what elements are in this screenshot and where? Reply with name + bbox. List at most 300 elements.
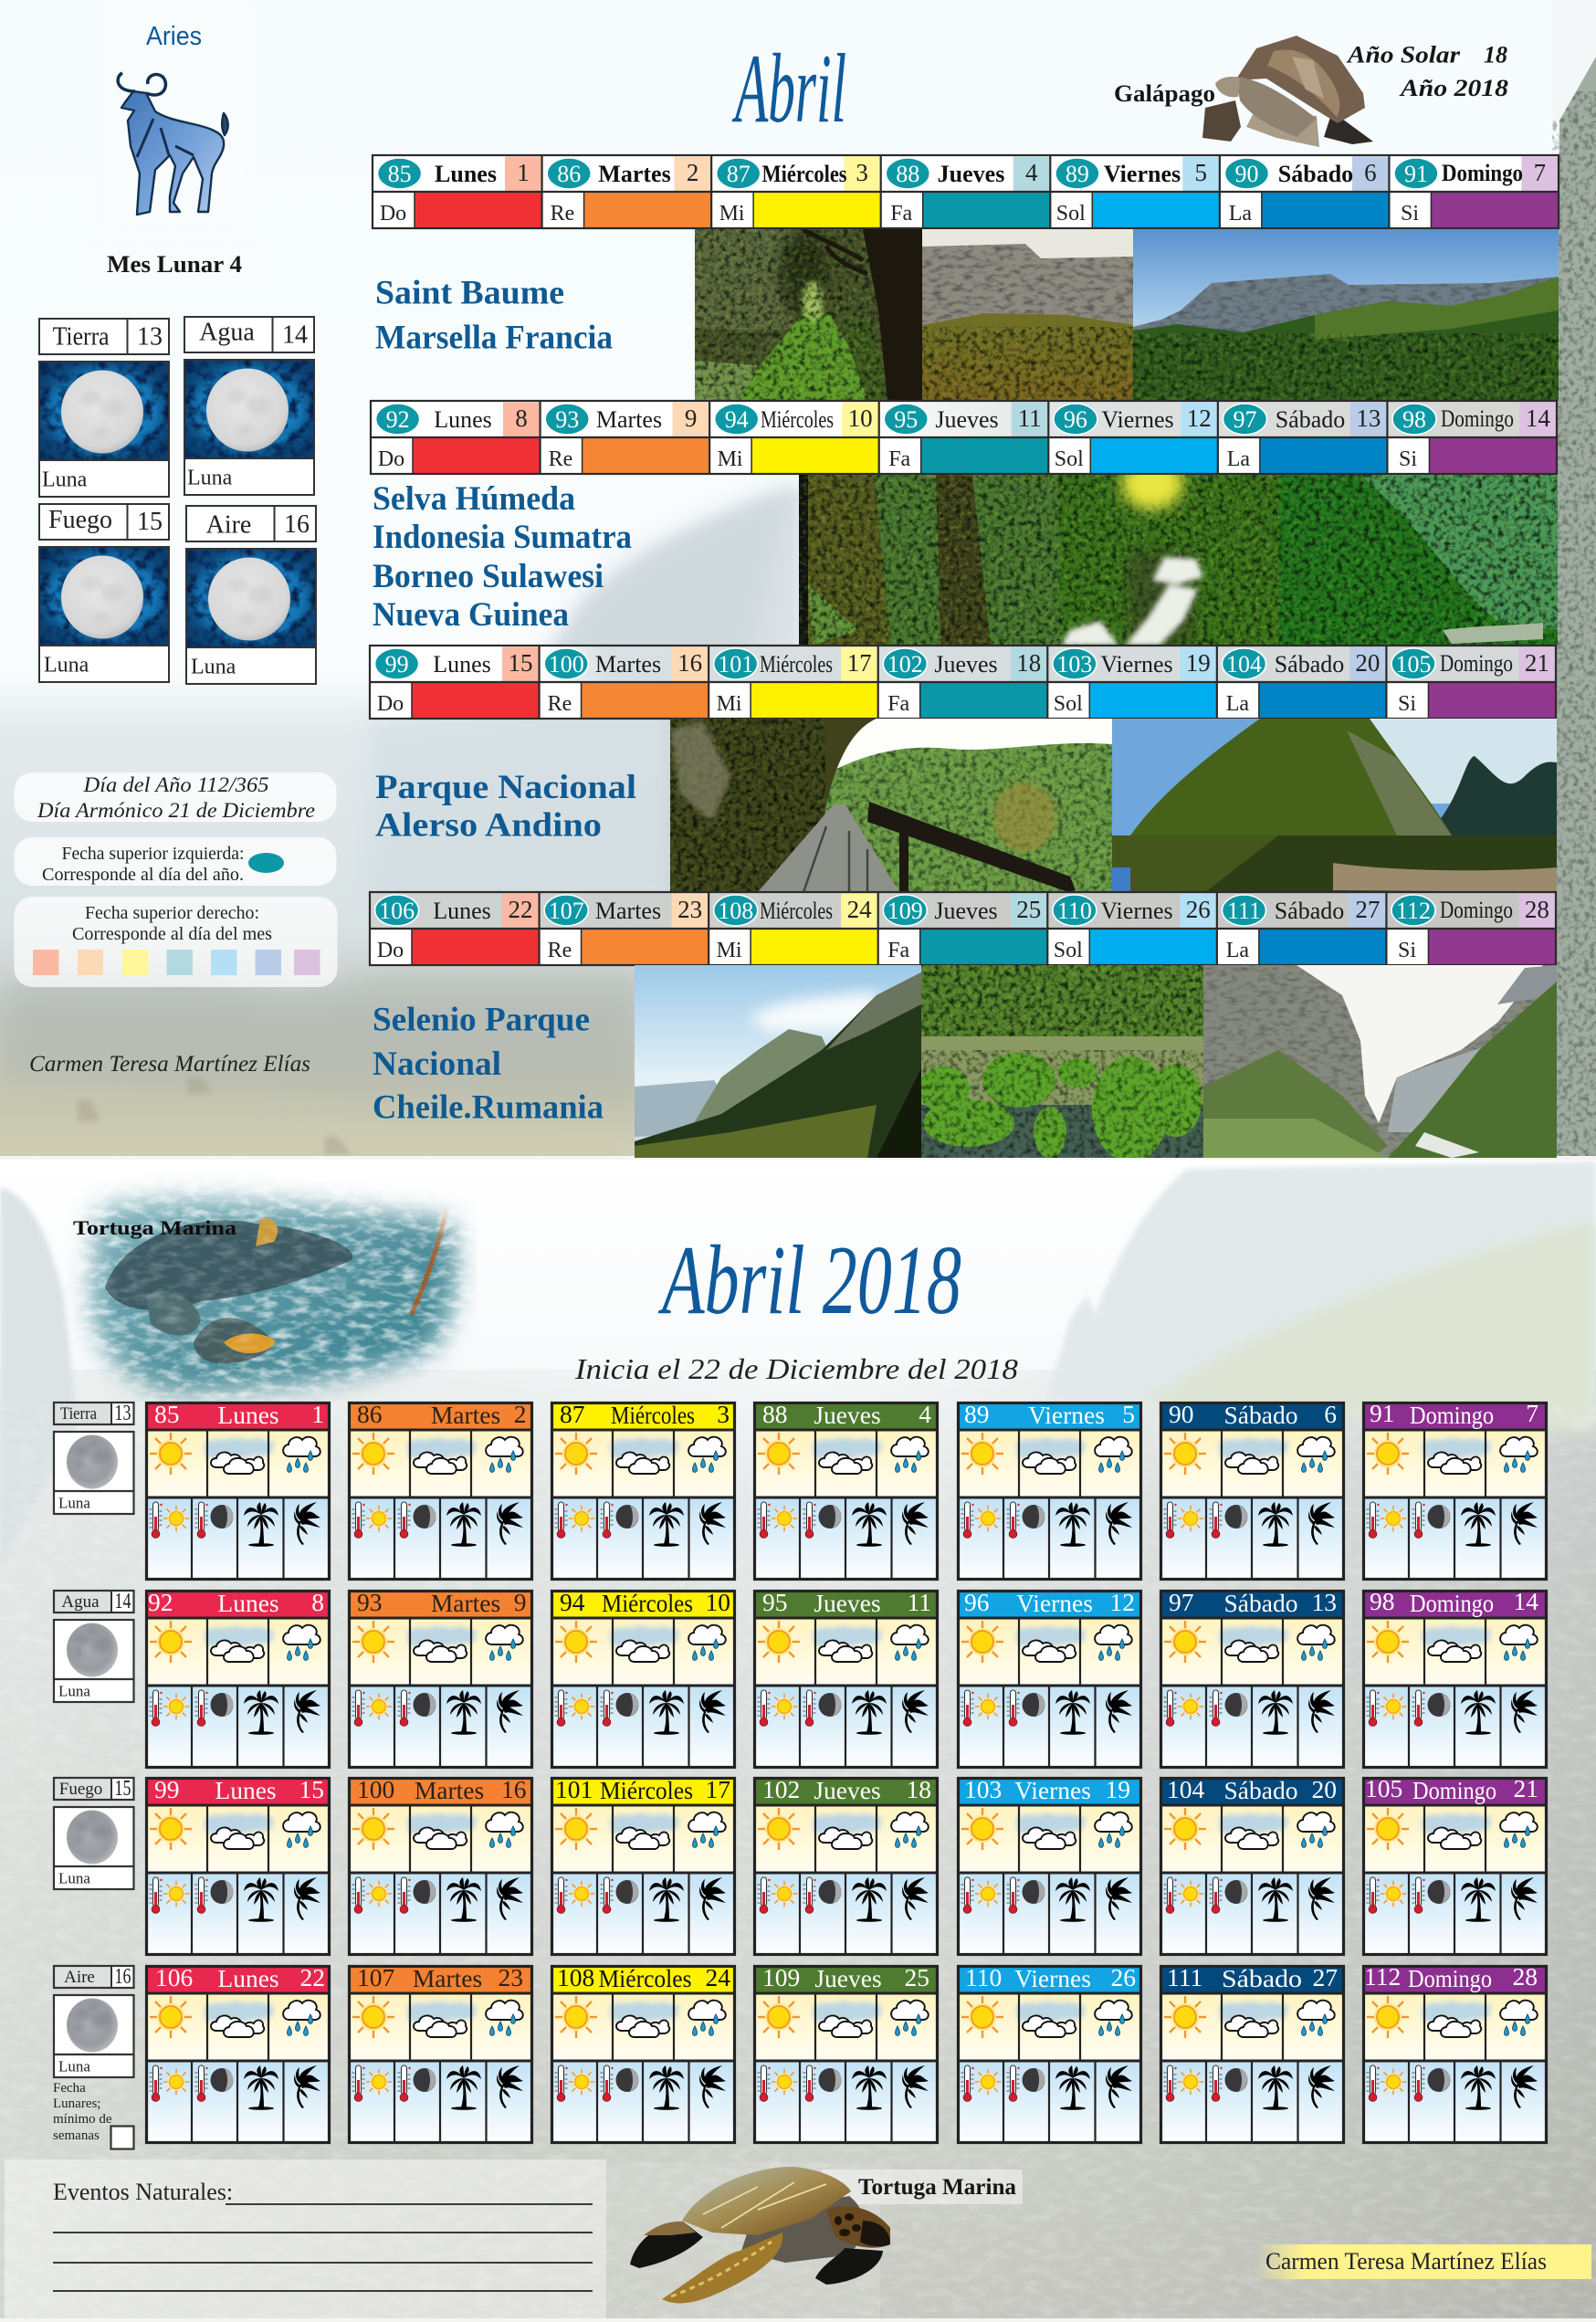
- side moon: Tierra: 13: [115, 1402, 131, 1425]
- day cell: Miércoles 3: 87: [727, 161, 751, 187]
- day cell: Domingo 7: 91: [1404, 161, 1428, 187]
- card: 106 Lunes 22: Lunes: [217, 1964, 279, 1992]
- day cell: Jueves 11: 95: [894, 406, 918, 433]
- card: 98 Domingo 14: Domingo: [1410, 1589, 1494, 1617]
- card: 92 Lunes 8: 92: [148, 1588, 173, 1616]
- day cell: Miércoles 3: Mi: [719, 202, 745, 226]
- title: Abril 2018: Abril 2018: [657, 1225, 961, 1335]
- card: 109 Jueves 25: 25: [904, 1963, 929, 1991]
- side moon: Aire: Aire: [64, 1968, 95, 1987]
- card: 99 Lunes 15: 99: [154, 1775, 179, 1803]
- card: 87 Miércoles 3: 3: [717, 1400, 730, 1428]
- icon: ram: [118, 73, 228, 215]
- day cell: Jueves 18: Jueves: [934, 651, 998, 678]
- card: 107 Martes 23: Martes: [413, 1964, 482, 1992]
- label: Tortuga Marina: Tortuga Marina: [858, 2175, 1017, 2200]
- day cell: Viernes 19: [1054, 649, 1211, 716]
- day cell: Martes 23: Re: [548, 939, 572, 962]
- day cell: Lunes 15: [377, 649, 533, 716]
- card: 95 Jueves 11: 95: [762, 1588, 787, 1616]
- day cell: Jueves 18: 102: [887, 651, 923, 678]
- icon: giant tortoise: [1202, 36, 1373, 147]
- card: 95 Jueves 11: [753, 1588, 939, 1769]
- day cell: Lunes 1: Lunes: [435, 161, 497, 187]
- day cell: Jueves 25: [887, 896, 1041, 962]
- card: 106 Lunes 22: [145, 1963, 331, 2144]
- card: 105 Domingo 21: 21: [1514, 1774, 1538, 1802]
- card: 110 Viernes 26: [957, 1963, 1142, 2144]
- card: 98 Domingo 14: 98: [1370, 1587, 1395, 1615]
- day cell: Miércoles 24: Miércoles: [760, 898, 833, 924]
- card: 93 Martes 9: 9: [514, 1588, 526, 1616]
- panel: day of year: Día del Año 112/365: [82, 773, 268, 796]
- day cell: Sábado 6: La: [1229, 202, 1252, 226]
- day cell: Sábado 6: 6: [1364, 159, 1377, 186]
- day cell: Sábado 13: [1227, 405, 1381, 471]
- card: 85 Lunes 1: [145, 1400, 331, 1581]
- moon card: Tierra: Tierra: [53, 323, 110, 351]
- card: 96 Viernes 12: [957, 1588, 1142, 1769]
- day cell: Sábado 20: 20: [1355, 649, 1380, 677]
- heading: Selenio Parque Nacional Cheile: Cheile.Rumania: [373, 1088, 604, 1127]
- card: 112 Domingo 28: 112: [1364, 1962, 1401, 1991]
- day cell: Martes 2: 2: [687, 159, 698, 186]
- credit: author: Carmen Teresa Martínez Elías: [1265, 2248, 1547, 2275]
- day cell: Jueves 11: 11: [1018, 405, 1042, 432]
- day cell: Martes 16: Martes: [595, 651, 661, 678]
- card: 93 Martes 9: [348, 1588, 533, 1769]
- card: 109 Jueves 25: 109: [762, 1963, 800, 1991]
- day cell: Sábado 13: 97: [1233, 406, 1256, 433]
- day cell: Lunes 8: [378, 405, 528, 471]
- card: 90 Sábado 6: [1160, 1400, 1345, 1581]
- moon card: Fuego: Fuego: [48, 506, 112, 534]
- day cell: Martes 16: [548, 649, 702, 716]
- card: 94 Miércoles 10: [551, 1588, 736, 1769]
- day cell: Sábado 20: La: [1226, 692, 1249, 716]
- card: 111 Sábado 27: 111: [1167, 1963, 1202, 1991]
- title: Abril: Abril: [731, 34, 846, 143]
- day cell: Domingo 21: 21: [1525, 649, 1549, 677]
- day cell: Lunes 8: 8: [515, 405, 528, 432]
- day cell: Domingo 7: Si: [1401, 202, 1419, 226]
- card: 111 Sábado 27: Sábado: [1222, 1964, 1302, 1992]
- card: 98 Domingo 14: 14: [1514, 1587, 1538, 1615]
- moon card: Agua: Luna: [187, 467, 233, 490]
- day cell: Martes 16: 16: [677, 649, 702, 677]
- card: 102 Jueves 18: [753, 1775, 939, 1956]
- day cell: Viernes 12: 12: [1187, 405, 1212, 432]
- photo strip: Selenio Cheile: [373, 965, 1557, 1162]
- moon card: Tierra: 13: [137, 323, 163, 351]
- day cell: Domingo 21: [1395, 649, 1549, 716]
- colour swatches: [33, 950, 320, 975]
- day cell: Lunes 22: Lunes: [433, 898, 491, 924]
- day cell: Viernes 12: 96: [1064, 406, 1087, 433]
- side moon: Agua: Luna: [58, 1682, 90, 1700]
- card: 97 Sábado 13: [1160, 1588, 1345, 1769]
- side moon: Tierra: Tierra: [60, 1404, 97, 1424]
- card: 86 Martes 2: Martes: [431, 1401, 500, 1429]
- panel: zodiac Aries: [100, 0, 247, 228]
- day cell: Sábado 20: [1226, 649, 1380, 716]
- side moon: Aire: [53, 1965, 135, 2078]
- card: 108 Miércoles 24: [551, 1963, 736, 2144]
- note: lunar dates: [53, 2081, 133, 2149]
- card: 98 Domingo 14: [1362, 1587, 1548, 1769]
- side moon: Aire: Luna: [58, 2058, 90, 2075]
- card: 97 Sábado 13: 97: [1169, 1588, 1194, 1616]
- heading: Selva Húmeda: Selva Húmeda: [373, 480, 575, 518]
- card: 111 Sábado 27: 27: [1313, 1963, 1338, 1991]
- day cell: Miércoles 17: Miércoles: [760, 651, 833, 678]
- day cell: Jueves 25: 109: [887, 898, 923, 924]
- day cell: Miércoles 24: 108: [718, 898, 753, 924]
- credit: author: [1255, 2244, 1591, 2279]
- day cell: Miércoles 3: Miércoles: [761, 161, 847, 187]
- day cell: Viernes 12: [1055, 405, 1212, 471]
- side moon: Agua: 14: [115, 1590, 131, 1613]
- side moon: Fuego: 15: [115, 1777, 131, 1801]
- card: 92 Lunes 8: Lunes: [217, 1589, 279, 1617]
- day cell: Miércoles 3: 3: [856, 159, 868, 186]
- moon card: Tierra: Luna: [42, 468, 88, 492]
- card: 102 Jueves 18: 18: [906, 1775, 931, 1803]
- card: 99 Lunes 15: 15: [299, 1775, 324, 1803]
- day cell: Viernes 5: 5: [1195, 159, 1207, 186]
- side moon: Tierra: Luna: [58, 1494, 90, 1512]
- day cell: Jueves 11: Jueves: [935, 406, 999, 433]
- photo: forest waterfall: [1059, 475, 1279, 645]
- card: 111 Sábado 27: [1160, 1963, 1345, 2144]
- day cell: Domingo 14: [1399, 405, 1550, 471]
- card: 101 Miércoles 17: [551, 1775, 736, 1956]
- day cell: Lunes 22: 22: [508, 896, 533, 923]
- day cell: Lunes 15: 99: [385, 651, 409, 678]
- note: lunar dates: mínimo de: [53, 2112, 112, 2127]
- photo: ridge and blue sky: [1133, 229, 1559, 401]
- label: Mes Lunar 4: [82, 245, 265, 285]
- card: 110 Viernes 26: 110: [965, 1963, 1002, 1991]
- card: 110 Viernes 26: Viernes: [1014, 1964, 1091, 1992]
- day cell: Domingo 14: Si: [1399, 447, 1417, 471]
- card: 103 Viernes 19: 19: [1105, 1775, 1130, 1803]
- day cell: Martes 23: Martes: [595, 898, 661, 924]
- day cell: Martes 2: Re: [551, 202, 574, 226]
- label: Tortuga Marina: Tortuga Marina: [73, 1216, 236, 1239]
- card: 85 Lunes 1: Lunes: [217, 1401, 279, 1429]
- heading: Selenio Parque Nacional Cheile: [373, 1001, 604, 1127]
- day cell: Sábado 20: Sábado: [1275, 651, 1344, 678]
- day cell: Viernes 26: Viernes: [1100, 898, 1173, 924]
- day cell: Sábado 6: 90: [1234, 161, 1258, 187]
- card: 103 Viernes 19: Viernes: [1014, 1776, 1091, 1804]
- card: 96 Viernes 12: Viernes: [1016, 1589, 1093, 1617]
- card: 88 Jueves 4: 88: [762, 1400, 787, 1428]
- day cell: Miércoles 10: Miércoles: [761, 406, 834, 433]
- card: 106 Lunes 22: 106: [155, 1963, 193, 1991]
- card: 104 Sábado 20: 20: [1311, 1775, 1337, 1803]
- card: 92 Lunes 8: 8: [311, 1588, 324, 1616]
- card: 95 Jueves 11: 11: [908, 1588, 931, 1616]
- heading: Saint Baume: Saint Baume: [375, 274, 564, 312]
- background: upper section landscape: [0, 0, 1596, 1161]
- card: 102 Jueves 18: Jueves: [814, 1776, 881, 1804]
- day cell: Miércoles 24: [717, 896, 872, 962]
- moon card: Fuego: [38, 503, 170, 682]
- card: 89 Viernes 5: [957, 1400, 1142, 1581]
- day cell: Lunes 8: Lunes: [434, 406, 492, 433]
- card: 99 Lunes 15: Lunes: [215, 1776, 277, 1804]
- card: 105 Domingo 21: 105: [1365, 1774, 1402, 1802]
- day cell: Martes 16: Re: [548, 692, 572, 716]
- day cell: Viernes 26: [1054, 896, 1211, 962]
- photo: boardwalk: [670, 719, 1112, 891]
- photo: forest path: [695, 229, 922, 400]
- side moon: Aire: 16: [115, 1965, 131, 1989]
- card: 108 Miércoles 24: 108: [557, 1963, 594, 1991]
- card: 109 Jueves 25: [753, 1963, 939, 2144]
- card: 100 Martes 16: 100: [357, 1775, 394, 1803]
- day cell: Domingo 28: 28: [1525, 896, 1549, 923]
- day cell: Viernes 5: 89: [1066, 161, 1089, 187]
- day cell: Martes 9: 9: [685, 405, 697, 432]
- card: 105 Domingo 21: Domingo: [1412, 1776, 1496, 1804]
- day cell: Sábado 20: 104: [1226, 651, 1262, 678]
- side moon: Agua: Agua: [61, 1592, 100, 1612]
- card: 97 Sábado 13: 13: [1311, 1588, 1337, 1616]
- day cell: Viernes 12: Sol: [1055, 447, 1084, 471]
- day cell: Lunes 1: [380, 159, 530, 226]
- card: 88 Jueves 4: Jueves: [814, 1401, 881, 1429]
- card: 101 Miércoles 17: 101: [555, 1775, 593, 1803]
- card: 90 Sábado 6: Sábado: [1224, 1401, 1297, 1429]
- label: solar year: 18: [1484, 42, 1507, 68]
- panel: legend upper right date: [15, 897, 338, 987]
- card: 88 Jueves 4: [753, 1400, 939, 1581]
- side moon: Fuego: Luna: [58, 1870, 90, 1886]
- card: 110 Viernes 26: 26: [1110, 1963, 1136, 1991]
- side moon: Fuego: Fuego: [59, 1780, 102, 1799]
- card: 100 Martes 16: [348, 1775, 533, 1956]
- day cell: Jueves 4: Fa: [890, 202, 913, 226]
- day cell: Sábado 13: Sábado: [1276, 406, 1345, 433]
- card: 104 Sábado 20: 104: [1167, 1775, 1205, 1803]
- photo strip: Parque Nacional Alerso Andino: [375, 719, 1557, 892]
- day cell: Sábado 27: 111: [1227, 898, 1261, 924]
- day cell: Viernes 19: 19: [1186, 649, 1211, 677]
- day cell: Domingo 14: 14: [1526, 405, 1550, 432]
- card: 91 Domingo 7: Domingo: [1410, 1401, 1494, 1429]
- day cell: Sábado 13: 13: [1356, 405, 1381, 432]
- heading: Parque Nacional Alerso Andino: [375, 769, 636, 844]
- icon: teal oval: [248, 853, 284, 873]
- side moon: Fuego: [53, 1777, 135, 1890]
- day cell: Viernes 5: Sol: [1056, 202, 1086, 226]
- card: 108 Miércoles 24: Miércoles: [599, 1964, 692, 1992]
- day cell: Domingo 28: [1396, 896, 1549, 962]
- heading: Parque Nacional Alerso Andino: Parque Nacional: [375, 769, 636, 806]
- heading: Selva Húmeda: [373, 480, 632, 634]
- card: 96 Viernes 12: 96: [964, 1588, 990, 1616]
- card: 91 Domingo 7: 7: [1526, 1399, 1538, 1427]
- photo strip: Selva Húmeda: [373, 458, 1558, 646]
- photo strip: Saint Baume: [375, 228, 1559, 401]
- moon card: Agua: [184, 316, 315, 495]
- card: 87 Miércoles 3: 87: [560, 1400, 584, 1428]
- day cell: Sábado 13: La: [1227, 447, 1250, 471]
- panel: legend upper right date: Fecha superior derecho:: [85, 903, 259, 923]
- subtitle: Inicia el 22 de Diciembre del 2018: [574, 1352, 1018, 1385]
- card: 107 Martes 23: 107: [357, 1963, 394, 1991]
- heading: Selva Húmeda: Indonesia Sumatra: [373, 519, 632, 556]
- author credit: Carmen Teresa Martínez Elías: [29, 1052, 310, 1077]
- day cell: Martes 9: Re: [549, 447, 572, 471]
- day cell: Miércoles 10: [718, 405, 873, 471]
- card: 93 Martes 9: 93: [357, 1588, 382, 1616]
- card: 89 Viernes 5: Viernes: [1028, 1401, 1105, 1429]
- day cell: Martes 23: 23: [677, 896, 702, 923]
- day cell: Domingo 7: [1401, 159, 1546, 226]
- label: solar year: [1346, 42, 1508, 101]
- background: lower section landscape: [0, 1160, 1596, 2322]
- day cell: Martes 2: 86: [557, 161, 581, 187]
- label: solar year: Año Solar: [1346, 42, 1461, 68]
- card: 112 Domingo 28: 28: [1512, 1962, 1538, 1991]
- moon card: Aire: Aire: [206, 511, 251, 540]
- card: 112 Domingo 28: [1362, 1962, 1548, 2144]
- heading: Parque Nacional Alerso Andino: Alerso Andino: [375, 807, 602, 844]
- day cell: Martes 9: 93: [555, 406, 579, 433]
- label: Galápago: Galápago: [1114, 80, 1215, 107]
- card: 94 Miércoles 10: Miércoles: [602, 1589, 693, 1617]
- card: 94 Miércoles 10: 10: [705, 1588, 730, 1616]
- calendar strip: week 2: [371, 401, 1557, 474]
- moon card: Tierra: [38, 318, 170, 497]
- card: 104 Sábado 20: [1160, 1775, 1345, 1956]
- photo: alpine valley: [635, 965, 921, 1158]
- card: 104 Sábado 20: Sábado: [1224, 1776, 1297, 1804]
- day cell: Viernes 5: [1056, 159, 1207, 226]
- card: 106 Lunes 22: 22: [299, 1963, 325, 1991]
- day cell: Domingo 28: Domingo: [1440, 897, 1513, 923]
- card: 93 Martes 9: Martes: [431, 1589, 500, 1617]
- day cell: Lunes 15: Lunes: [433, 651, 491, 678]
- panel: Eventos Naturales: [5, 2159, 606, 2318]
- day cell: Martes 2: Martes: [598, 161, 671, 187]
- day cell: Jueves 18: [887, 649, 1041, 716]
- day cell: Viernes 26: 110: [1057, 898, 1092, 924]
- heading: Saint Baume: Marsella Francia: [375, 320, 613, 356]
- panel: legend upper left date: Corresponde al día del año.: [42, 865, 244, 885]
- card: 91 Domingo 7: 91: [1370, 1399, 1395, 1427]
- day cell: Viernes 19: Sol: [1054, 692, 1083, 716]
- day cell: Jueves 11: [888, 405, 1042, 471]
- card: 109 Jueves 25: Jueves: [814, 1964, 882, 1992]
- day cell: Martes 2: [551, 159, 698, 226]
- card: 97 Sábado 13: Sábado: [1224, 1589, 1297, 1617]
- day cell: Martes 16: 100: [549, 651, 584, 678]
- day cell: Martes 23: [548, 896, 702, 962]
- day cell: Miércoles 10: Mi: [718, 447, 743, 471]
- moon card: Aire: [185, 505, 317, 684]
- card: 107 Martes 23: 23: [499, 1963, 523, 1991]
- panel: Eventos Naturales: Eventos Naturales:: [53, 2179, 233, 2205]
- card: 89 Viernes 5: 89: [964, 1400, 990, 1428]
- day cell: Miércoles 17: 17: [847, 649, 872, 677]
- side moon: Tierra: [53, 1402, 135, 1515]
- label: Mes Lunar 4: Mes Lunar 4: [107, 251, 242, 278]
- day cell: Miércoles 10: 94: [725, 406, 749, 433]
- card: 103 Viernes 19: 103: [964, 1775, 1002, 1803]
- day cell: Jueves 18: Fa: [887, 692, 910, 716]
- heading: Saint Baume: [375, 274, 613, 356]
- card: 90 Sábado 6: 90: [1169, 1400, 1194, 1428]
- moon card: Agua: 14: [282, 321, 308, 349]
- day cell: Domingo 7: 7: [1534, 159, 1546, 186]
- day cell: Domingo 14: 98: [1402, 406, 1426, 433]
- photo: jungle valley: [1279, 475, 1558, 646]
- moon card: Aire: 16: [284, 510, 310, 539]
- day cell: Lunes 1: 1: [517, 159, 530, 186]
- day cell: Miércoles 17: Mi: [717, 692, 742, 716]
- moon card: Fuego: 15: [137, 508, 163, 536]
- day cell: Sábado 6: [1229, 159, 1377, 226]
- card: 112 Domingo 28: Domingo: [1408, 1964, 1492, 1992]
- moon card: Fuego: Luna: [44, 654, 89, 678]
- moon card: Aire: Luna: [191, 656, 236, 679]
- day cell: Domingo 28: Si: [1398, 939, 1416, 962]
- illustration: swimming sea turtle: [606, 2162, 1023, 2318]
- day cell: Domingo 21: Domingo: [1440, 650, 1513, 677]
- day cell: Martes 9: [549, 405, 697, 471]
- panel: day of year: Día Armónico 21 de Diciembre: [37, 799, 315, 822]
- day cell: Domingo 28: 112: [1396, 898, 1431, 924]
- day cell: Jueves 4: [890, 159, 1038, 226]
- photo: cliff over autumn forest: [922, 229, 1133, 400]
- day cell: Domingo 21: Si: [1398, 692, 1416, 716]
- panel: legend upper left date: [15, 837, 336, 886]
- day cell: Sábado 27: Sábado: [1275, 898, 1344, 924]
- card: 86 Martes 2: [348, 1400, 533, 1581]
- card: 102 Jueves 18: 102: [762, 1775, 800, 1803]
- day cell: Lunes 22: [377, 896, 533, 962]
- day cell: Lunes 15: Do: [377, 692, 404, 716]
- day cell: Viernes 12: Viernes: [1101, 406, 1174, 433]
- day cell: Domingo 14: Domingo: [1441, 405, 1514, 432]
- note: lunar dates: Fecha: [53, 2081, 86, 2096]
- day cell: Jueves 11: Fa: [888, 447, 911, 471]
- day cell: Lunes 1: 85: [388, 161, 412, 187]
- card: 105 Domingo 21: [1362, 1774, 1548, 1956]
- panel: legend upper right date: Corresponde al día del mes: [72, 924, 272, 944]
- day cell: Miércoles 17: [717, 649, 872, 716]
- day cell: Lunes 22: Do: [377, 939, 404, 962]
- card: 100 Martes 16: 16: [501, 1775, 526, 1803]
- day cell: Lunes 8: Do: [378, 447, 404, 471]
- heading: Selva Húmeda: Nueva Guinea: [373, 596, 569, 634]
- calendar strip: week 1: [373, 155, 1559, 228]
- card: 96 Viernes 12: 12: [1110, 1588, 1135, 1616]
- card: 85 Lunes 1: 1: [311, 1400, 324, 1428]
- heading: Selenio Parque Nacional Cheile: Nacional: [373, 1045, 501, 1083]
- card: 90 Sábado 6: 6: [1324, 1400, 1337, 1428]
- day cell: Domingo 21: 105: [1395, 651, 1432, 678]
- card: 85 Lunes 1: 85: [154, 1400, 179, 1428]
- day cell: Jueves 25: Jueves: [934, 898, 998, 924]
- label: solar year: Año 2018: [1399, 75, 1508, 101]
- heading: Aries: Aries: [146, 22, 202, 51]
